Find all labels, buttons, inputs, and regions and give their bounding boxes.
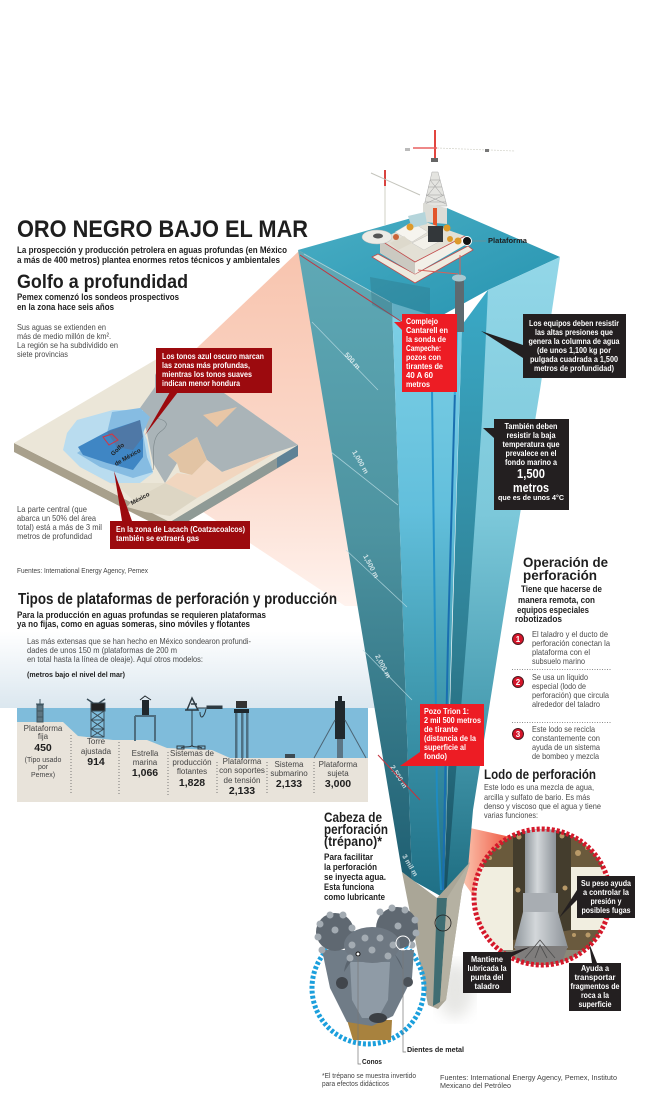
step 1: 1 [516,635,521,644]
callout: transport: superficie [578,1000,612,1009]
callout: transport [569,943,621,1011]
callout: lubrication: lubricada la [468,964,507,973]
callout: Lacach: En la zona de Lacach (Coatzacoalcos) [116,525,245,534]
labels: marina [133,758,158,767]
text: lubricant: Para facilitar [324,852,373,862]
step 3: constantemente con [532,733,600,743]
labels: flotantes [177,767,207,776]
right face [442,257,560,900]
callout: temperature: fondo marino a [505,458,557,467]
text: central part: total) está a más de 3 mil [17,522,102,532]
cranes [371,130,515,225]
step 2: perforación) que circula [532,690,609,700]
red depth line Trion [378,755,420,800]
callout: pressure: Los equipos deben resistir [529,319,619,328]
icon: floating production [177,698,222,749]
peach projection wedge from shaft to map [100,250,395,606]
shaft: ocean cross-section column [298,208,560,1009]
callout: Cantarell: Complejo [406,317,438,326]
text: central part [17,504,102,541]
icon: fixed platform [36,699,44,722]
step 2: Se usa un líquido [532,672,588,682]
callout: Lacach [110,471,250,549]
inner light band [392,303,462,898]
gray sea [140,353,298,483]
text: gulf extent: siete provincias [17,349,68,359]
text: mud: varias funciones: [484,810,538,820]
callout: pressure: las altas presiones que [535,328,613,337]
callout: pressure: metros de profundidad) [534,364,614,373]
callout: pressure: (de unos 1,100 kg por [537,346,611,355]
map: Gulf of Mexico isometric block: de México [114,448,142,468]
text: platforms intro: en total hasta la línea de oleaje). Aquí otros modelos: [27,654,203,664]
text: mud [484,782,601,820]
callout: temperature: 1,500 [517,467,545,481]
icon: tension leg [234,701,249,758]
callout: temperature: metros [513,481,549,495]
callout: lubrication: Mantiene [471,955,504,964]
callout: Cantarell: metros [406,380,430,389]
labels: (Tipo usado [25,757,61,764]
step 3: ayuda de un sistema [532,742,600,752]
subheading: platform types: Para la producción en aguas profundas se requieren plataformas [17,610,266,621]
text: lubricant [324,852,386,902]
label: dientes de metal: Dientes de metal [407,1045,464,1054]
callout: pressure: genera la columna de agua [528,337,620,346]
seabed [17,722,368,802]
labels: Plataforma [319,760,358,769]
labels: submarino [270,769,308,778]
callout: dark tones: indican menor hondura [162,379,240,388]
callout: dark tones: Los tonos azul oscuro marcan [162,352,264,361]
subheading: platform types: ya no fijas, como en aguas someras, sino móviles y flotantes [17,619,250,630]
callout: Pozo Trion: superficie al [424,743,466,752]
step 1: El taladro y el ducto de [532,629,608,639]
depth labels: 2,000 m [373,654,391,680]
map: Gulf of Mexico isometric block: México [130,492,151,507]
source: map: Fuentes: International Energy Agency, Pemex [17,566,148,575]
labels: fija [38,732,49,741]
callout: temperature [483,419,569,510]
callout: lubrication: taladro [474,982,500,991]
step 1: subsuelo marino [532,656,585,666]
text: lubricant: se inyecta agua. [324,872,386,882]
callout: temperature: temperatura que [502,440,560,449]
source: main: Mexicano del Petróleo [440,1083,511,1090]
intro text: La prospección y producción petrolera en aguas profundas (en México [17,245,287,256]
text: gulf extent: Sus aguas se extienden en [17,322,106,332]
heading: Cabeza de perforación: Cabeza de [324,810,382,825]
text: lubricant: Esta funciona [324,882,375,892]
text: platforms intro: Las más extensas que se han hecho en México sondearon profundi- [27,636,251,646]
subheading: platform types [17,610,266,630]
red depth line Cantarell [300,255,402,322]
step 3: de bombeo y mezcla [532,751,599,761]
heading: Lodo de perforación: Lodo de perforación [484,767,596,782]
labels: por [38,764,49,771]
chart: platform depth cross-section [17,696,368,802]
main title: ORO NEGRO BAJO EL MAR [17,216,308,243]
icon: compliant tower [87,699,105,737]
footnote: para efectos didácticos [322,1081,389,1088]
footnote [322,1073,416,1088]
icon: tethered platform [314,696,366,758]
heading: platform types: Tipos de plataformas de perforación y producción [18,591,337,608]
labels: 1,828 [179,777,205,789]
callout: transport: transportar [574,973,616,982]
text: central part: metros de profundidad [17,531,92,541]
text: lubricant: la perforación [324,862,377,872]
callout: Pozo Trion: fondo) [424,752,447,761]
hull [372,246,473,283]
map: Gulf of Mexico isometric block [14,353,298,532]
legs [455,277,464,332]
depth labels: 3 mil m [400,854,418,878]
label: conos [356,952,382,1066]
text: gulf extent: La región se ha subdividido en [17,340,118,350]
map: Gulf of Mexico isometric block: Golfo [110,442,126,457]
lower grey section [402,862,470,1009]
heading: Operación de perforación: perforación [523,567,597,583]
depth lines [304,254,412,700]
labels: 3,000 [325,778,351,790]
callout: Cantarell: Campeche: [406,344,441,353]
text: central part: La parte central (que [17,504,87,514]
inner dark band [444,290,488,898]
divider lines [71,735,314,795]
callout: Pozo Trion [400,704,484,766]
illustration: drill bit [312,904,424,1044]
text: mud: Este lodo es una mezcla de agua, [484,782,594,792]
panel background gradient: platform types [0,590,375,708]
text: gulf extent: más de medio millón de km². [17,331,111,341]
land [168,437,207,475]
source: main [440,1075,617,1090]
callout: Cantarell: 40 A 60 [406,371,434,380]
callout: temperature: que es de unos 4°C [498,493,565,502]
subheading: operation: equipos especiales [517,605,589,615]
labels: Sistema [275,760,304,769]
step 2: 2 [516,678,521,687]
callout: weight [559,876,635,918]
subheading: operation [515,584,602,624]
callout: Cantarell: pozos con [406,353,441,362]
text: mud: arcilla y sulfato de bario. Es más [484,792,590,802]
heading: Cabeza de perforación [324,810,388,849]
labels: ajustada [81,747,112,756]
subheading: Pemex: Pemex comenzó los sondeos prospectivos [17,292,179,303]
label: plataforma: Plataforma [488,236,528,245]
step 1 [512,629,610,666]
source: main: Fuentes: International Energy Agency, Pemex, Instituto [440,1075,617,1082]
callout: Pozo Trion: (distancia de la [424,734,476,743]
labels: Plataforma [223,757,262,766]
text: central part: abarca un 50% del área [17,513,96,523]
subheading: operation: robotizados [515,614,562,624]
helipad [362,230,392,244]
text: platforms intro [27,636,251,664]
labels: con soportes [219,766,265,775]
callout: pressure [481,314,626,378]
callout: dark tones [145,348,272,435]
callout: dark tones: mientras los tonos suaves [162,370,252,379]
callout: transport: Ayuda a [581,964,609,973]
labels: Sistemas de [170,749,215,758]
subheading: Pemex [17,292,179,313]
subheading: operation: manera remota, con [518,595,595,605]
callout: lubrication [463,947,530,993]
step 3 [512,724,600,761]
step 1: perforación conectan la [532,638,610,648]
bathymetry [63,410,153,483]
text: lubricant: como lubricante [324,892,385,902]
icon: subsea [285,754,295,758]
labels: 2,133 [229,785,255,797]
callout: weight: posibles fugas [582,906,631,915]
illustration: oil platform [362,130,515,332]
heading: Cabeza de perforación: perforación [324,822,388,837]
labels: 2,133 [276,778,302,790]
callout: temperature: prevalece en el [506,449,556,458]
heading: Operación de perforación [523,554,608,583]
callout: Cantarell: la sonda de [406,335,446,344]
step 2 [512,672,609,709]
water reflection under platform [370,277,430,320]
label: plataforma [462,236,528,246]
callout: temperature: También deben [504,422,558,431]
derrick [424,172,447,206]
red wedge toward drilling detail [462,828,515,905]
left face [298,250,412,880]
labels: 1,066 [132,767,158,779]
callout: transport: roca a la [581,991,609,1000]
top surface [298,208,560,322]
labels: de tensión [224,776,260,785]
depth labels: 2,500 m [388,764,408,790]
callout: lubrication: punta del [470,973,504,982]
callout: weight: a controlar la [583,888,629,897]
labels: Estrella [132,749,159,758]
labels: 914 [87,756,105,768]
labels: sujeta [327,769,349,778]
label: dientes de metal [403,950,464,1054]
depth labels [343,352,418,878]
callout: Pozo Trion: 2 mil 500 metros [424,716,481,725]
soft shadow of shaft [437,962,473,1018]
heading: Cabeza de perforación: (trépano)* [324,834,383,849]
text: platforms intro: dades de unos 150 m (plataformas de 200 m [27,645,177,655]
labels: Pemex) [31,772,55,779]
step 3: Este lodo se recicla [532,724,595,734]
callout: dark tones: las zonas más profundas, [162,361,250,370]
icon: seastar [135,696,155,741]
depth labels: 500 m [343,352,361,371]
subheading: operation: Tiene que hacerse de [521,584,602,594]
callout: Pozo Trion: Pozo Trion 1: [424,707,469,716]
callout: weight: Su peso ayuda [581,879,631,888]
step 3: 3 [516,730,521,739]
sea [17,708,368,760]
labels [24,724,358,797]
footnote: *El trépano se muestra invertido [322,1073,416,1080]
callout: Cantarell: Cantarell en [406,326,448,335]
callout: Cantarell [394,314,457,392]
step 2: alrededor del taladro [532,699,600,709]
callout: Lacach: también se extraerá gas [116,534,199,543]
labels: Torre [87,737,106,746]
callout: Cantarell: tirantes de [406,362,443,371]
callout: Pozo Trion: de tirante [424,725,459,734]
labels: 450 [34,742,52,754]
step 2: especial (lodo de [532,681,586,691]
heading: Golfo a profundidad: Golfo a profundidad [17,272,188,293]
callout: transport: fragmentos de [570,982,620,991]
seabed drill marker [435,915,451,931]
text: gulf extent [17,322,118,359]
deck modules [395,222,428,242]
intro text: a más de 400 metros) plantea enormes retos técnicos y ambientales [17,255,280,266]
depth labels: 1,000 m [350,450,369,475]
callout: temperature: resistir la baja [506,431,556,440]
pipes [432,390,441,890]
labels: producción [172,758,212,767]
callout: weight: presión y [590,897,622,906]
label: conos: Conos [362,1057,382,1066]
heading: Operación de perforación: Operación de [523,554,608,570]
text: mud: denso y viscoso que el agua y tiene [484,801,601,811]
illustration: drilling detail circle [470,825,615,970]
unit note: (metros bajo el nivel del mar) [27,670,125,679]
callout: pressure: pulgada cuadrada a 1,500 [530,355,618,364]
labels: Plataforma [24,724,63,733]
subheading: Pemex: en la zona hace seis años [17,302,114,313]
depth labels: 1,500 m [361,554,379,580]
intro text [17,245,287,266]
step 1: plataforma con el [532,647,590,657]
